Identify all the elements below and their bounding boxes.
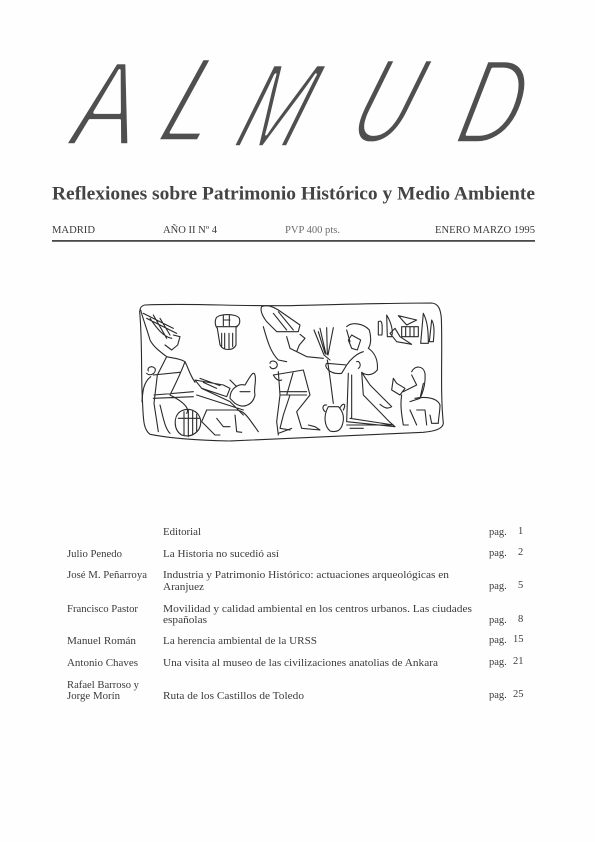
bull with harness [195,373,258,435]
masthead title: ALMUD: L [145,33,249,167]
entry: Francisco Pastor: pag. [489,615,507,626]
masthead title: ALMUD: A [62,37,149,171]
entry: Rafael Barroso y Jorge Morín: Ruta de los Castillos de Toledo [163,691,304,702]
left figure, raised arm and headdress [141,310,195,433]
entry: Rafael Barroso y Jorge Morín: Rafael Barroso y [67,680,140,691]
entry: Manuel Román: Manuel Román [67,636,137,647]
staff with three prongs [314,328,333,403]
entry: José M. Peñarroya: pag. [489,581,507,592]
emblem vase top left [215,315,240,349]
amphora [323,404,345,432]
entry: Julio Penedo: 2 [518,547,523,558]
entry: Julio Penedo: pag. [489,548,507,559]
issue information bar [52,224,535,242]
entry: Francisco Pastor [67,604,523,626]
entry: Manuel Román [67,634,524,647]
entry: Rafael Barroso y Jorge Morín: 25 [513,689,524,700]
entry: Rafael Barroso y Jorge Morín: Jorge Morín [67,691,121,702]
entry: Antonio Chaves: Antonio Chaves [67,658,138,669]
entry: José M. Peñarroya [67,570,523,593]
entry: Editorial: Editorial [163,527,201,538]
central figure with raised arm [261,306,323,435]
entry: Manuel Román: pag. [489,635,507,646]
entry: José M. Peñarroya: Aranjuez [163,582,204,593]
entry: Rafael Barroso y Jorge Morín [67,680,524,702]
issue information bar: MADRID [52,225,95,236]
entry: Antonio Chaves: Una visita al museo de las civilizaciones anatolias de Ankara [163,658,438,669]
entry: Julio Penedo: Julio Penedo [67,549,122,560]
entry: Antonio Chaves: 21 [513,656,524,667]
issue information bar: ENERO MARZO 1995 [435,225,535,236]
table of contents [67,526,524,702]
masthead title: ALMUD: M [221,40,337,173]
entry: Editorial: 1 [518,526,523,537]
entry: Julio Penedo: La Historia no sucedió así [163,549,279,560]
entry: José M. Peñarroya: 5 [518,580,523,591]
issue information bar: PVP 400 pts. [285,225,340,236]
entry: Editorial [163,526,523,538]
entry: Antonio Chaves [67,656,524,669]
cuneiform symbols top right [378,313,434,344]
small figure on lion [392,367,440,425]
entry: Antonio Chaves: pag. [489,657,507,668]
masthead title: ALMUD: D [447,35,542,169]
entry: Rafael Barroso y Jorge Morín: pag. [489,690,507,701]
entry: Julio Penedo [67,547,523,560]
subtitle: Reflexiones sobre Patrimonio Histórico y Medio Ambiente [52,184,535,204]
entry: Manuel Román: La herencia ambiental de la URSS [163,636,317,647]
entry: Francisco Pastor: 8 [518,614,523,625]
illustration: Hittite seal relief with figures and animals [140,303,443,441]
entry: José M. Peñarroya: José M. Peñarroya [67,570,147,581]
masthead title: ALMUD: U [335,35,443,168]
chariot wheel [175,409,201,437]
masthead title: ALMUD [62,33,542,173]
seal outline [140,303,443,441]
entry: Editorial: pag. [489,527,507,538]
entry: Francisco Pastor: Francisco Pastor [67,604,139,615]
entry: Manuel Román: 15 [513,634,524,645]
entry: Francisco Pastor: Movilidad y calidad ambiental en los centros urbanos. Las ciudades [163,604,472,615]
entry: Francisco Pastor: españolas [163,615,207,626]
issue information bar: AÑO II Nº 4 [163,224,218,236]
entry: José M. Peñarroya: Industria y Patrimonio Histórico: actuaciones arqueológicas en [163,570,450,581]
seated goddess [326,324,395,428]
